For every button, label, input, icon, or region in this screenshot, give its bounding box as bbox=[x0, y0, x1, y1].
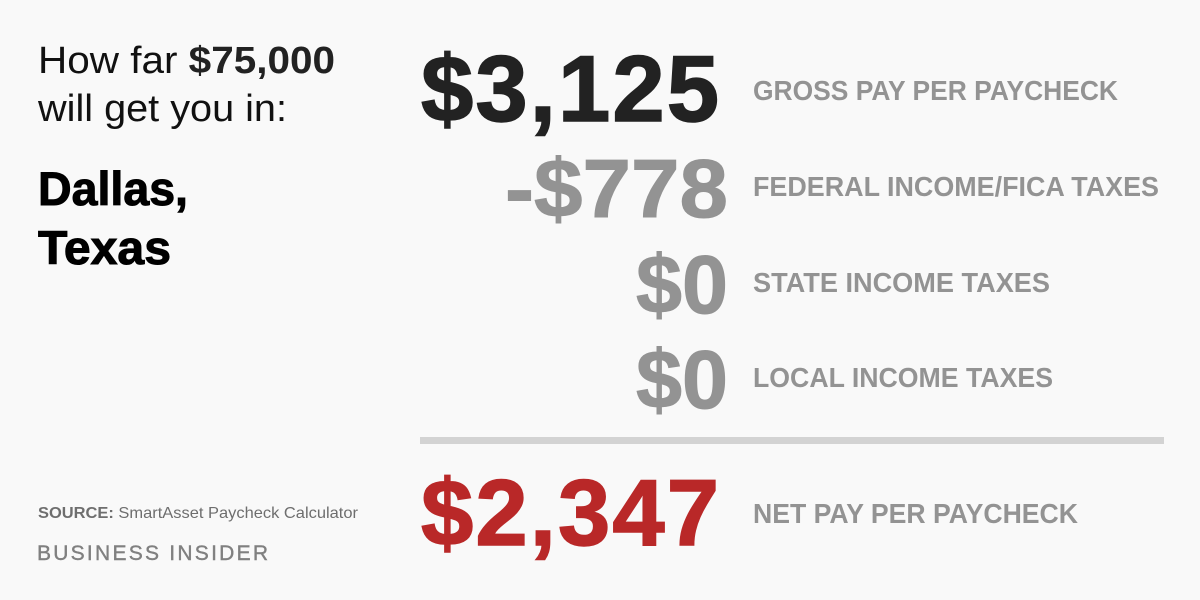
state taxes label: STATE INCOME TAXES bbox=[753, 267, 1050, 298]
row: state taxes bbox=[636, 238, 1050, 331]
net pay label: NET PAY PER PAYCHECK bbox=[753, 498, 1078, 529]
panel: intro heading bbox=[37, 40, 335, 130]
city: Dallas, bbox=[38, 162, 188, 215]
row: federal taxes bbox=[505, 142, 1159, 235]
brand wordmark: BUSINESS INSIDER bbox=[37, 542, 268, 565]
federal taxes amount: -$778 bbox=[505, 142, 728, 235]
local taxes label: LOCAL INCOME TAXES bbox=[753, 362, 1053, 393]
row: gross pay bbox=[421, 36, 1118, 141]
source note: SOURCE: SmartAsset Paycheck Calculator bbox=[38, 505, 359, 522]
local taxes amount: $0 bbox=[636, 333, 728, 426]
panel: city name bbox=[38, 162, 188, 274]
net pay amount: $2,347 bbox=[421, 460, 719, 565]
row: net pay bbox=[421, 460, 1078, 565]
heading line 1: How far $75,000 bbox=[38, 40, 335, 82]
gross pay label: GROSS PAY PER PAYCHECK bbox=[753, 75, 1118, 106]
row: local taxes bbox=[636, 333, 1053, 426]
gross pay amount: $3,125 bbox=[421, 36, 719, 141]
federal taxes label: FEDERAL INCOME/FICA TAXES bbox=[753, 171, 1159, 202]
heading line 2: will get you in: bbox=[37, 88, 287, 130]
state taxes amount: $0 bbox=[636, 238, 728, 331]
state: Texas bbox=[38, 221, 171, 274]
